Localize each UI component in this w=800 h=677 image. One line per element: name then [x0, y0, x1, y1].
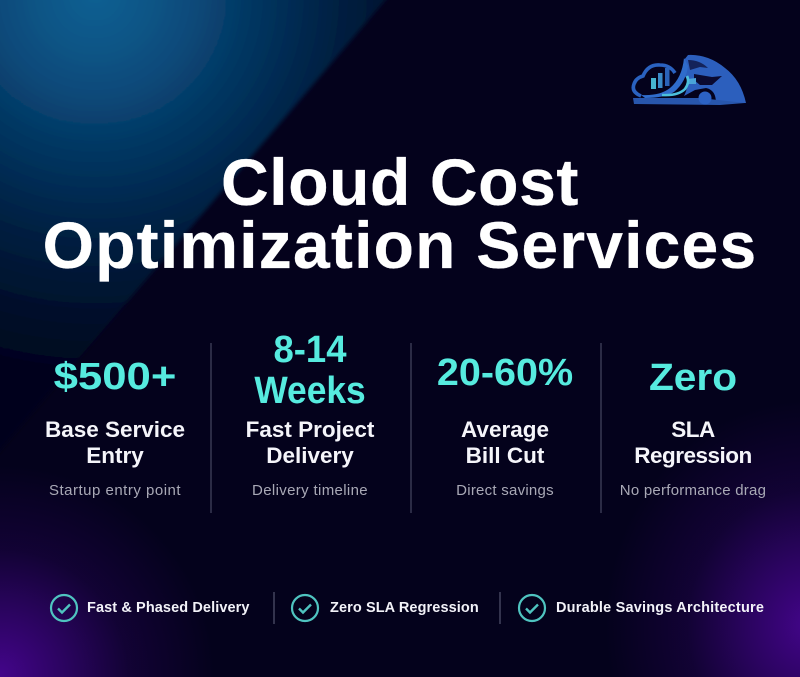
- stat 1 label: [45, 417, 185, 468]
- stat 2 values: [254, 329, 366, 412]
- stat 3 label: [461, 417, 549, 468]
- stat 2 label: Delivery: [266, 443, 354, 468]
- stat 4 label: [634, 417, 752, 468]
- title line 1: Cloud Cost: [221, 145, 579, 219]
- value line 2: Weeks: [254, 370, 366, 412]
- stat 4 value: Zero: [649, 357, 737, 399]
- stat 4 label: SLA: [671, 417, 715, 442]
- stat 2 note: Delivery timeline: [252, 482, 368, 499]
- divider: [273, 592, 274, 624]
- badge: Fast & Phased Delivery: [50, 594, 250, 622]
- stat 3: [437, 352, 573, 499]
- icon: check: [50, 594, 78, 622]
- stat 4: [620, 357, 766, 499]
- badge text: Durable Savings Architecture: [556, 600, 764, 616]
- stat 3 note: Direct savings: [456, 482, 554, 499]
- badge text: Zero SLA Regression: [330, 600, 479, 616]
- stat 2 label: Fast Project: [246, 417, 374, 442]
- title: [43, 145, 757, 282]
- stat 1 label: Entry: [86, 443, 144, 468]
- stat 4 label: Regression: [634, 443, 752, 468]
- icon: cloud truck logo: [632, 54, 746, 105]
- stat 1: [45, 356, 185, 499]
- stat 1 value: $500+: [54, 356, 176, 398]
- stat 4 note: No performance drag: [620, 482, 766, 499]
- stat 2: [246, 329, 374, 499]
- stat 3 label: Bill Cut: [466, 443, 544, 468]
- icon: check: [290, 594, 320, 622]
- stat 2 label: [246, 417, 374, 468]
- value line 1: 8-14: [273, 329, 347, 371]
- icon: check: [518, 594, 546, 622]
- badge: Zero SLA Regression: [290, 594, 479, 622]
- stat 3 value: 20-60%: [437, 352, 573, 394]
- badge: Durable Savings Architecture: [518, 594, 764, 622]
- divider: [410, 343, 412, 513]
- badge text: Fast & Phased Delivery: [87, 600, 250, 616]
- stat 1 note: Startup entry point: [49, 482, 181, 499]
- divider: [499, 592, 500, 624]
- divider: [210, 343, 212, 513]
- stat 1 label: Base Service: [45, 417, 185, 442]
- stat 3 label: Average: [461, 417, 549, 442]
- title line 2: Optimization Services: [43, 208, 757, 282]
- divider: [600, 343, 602, 513]
